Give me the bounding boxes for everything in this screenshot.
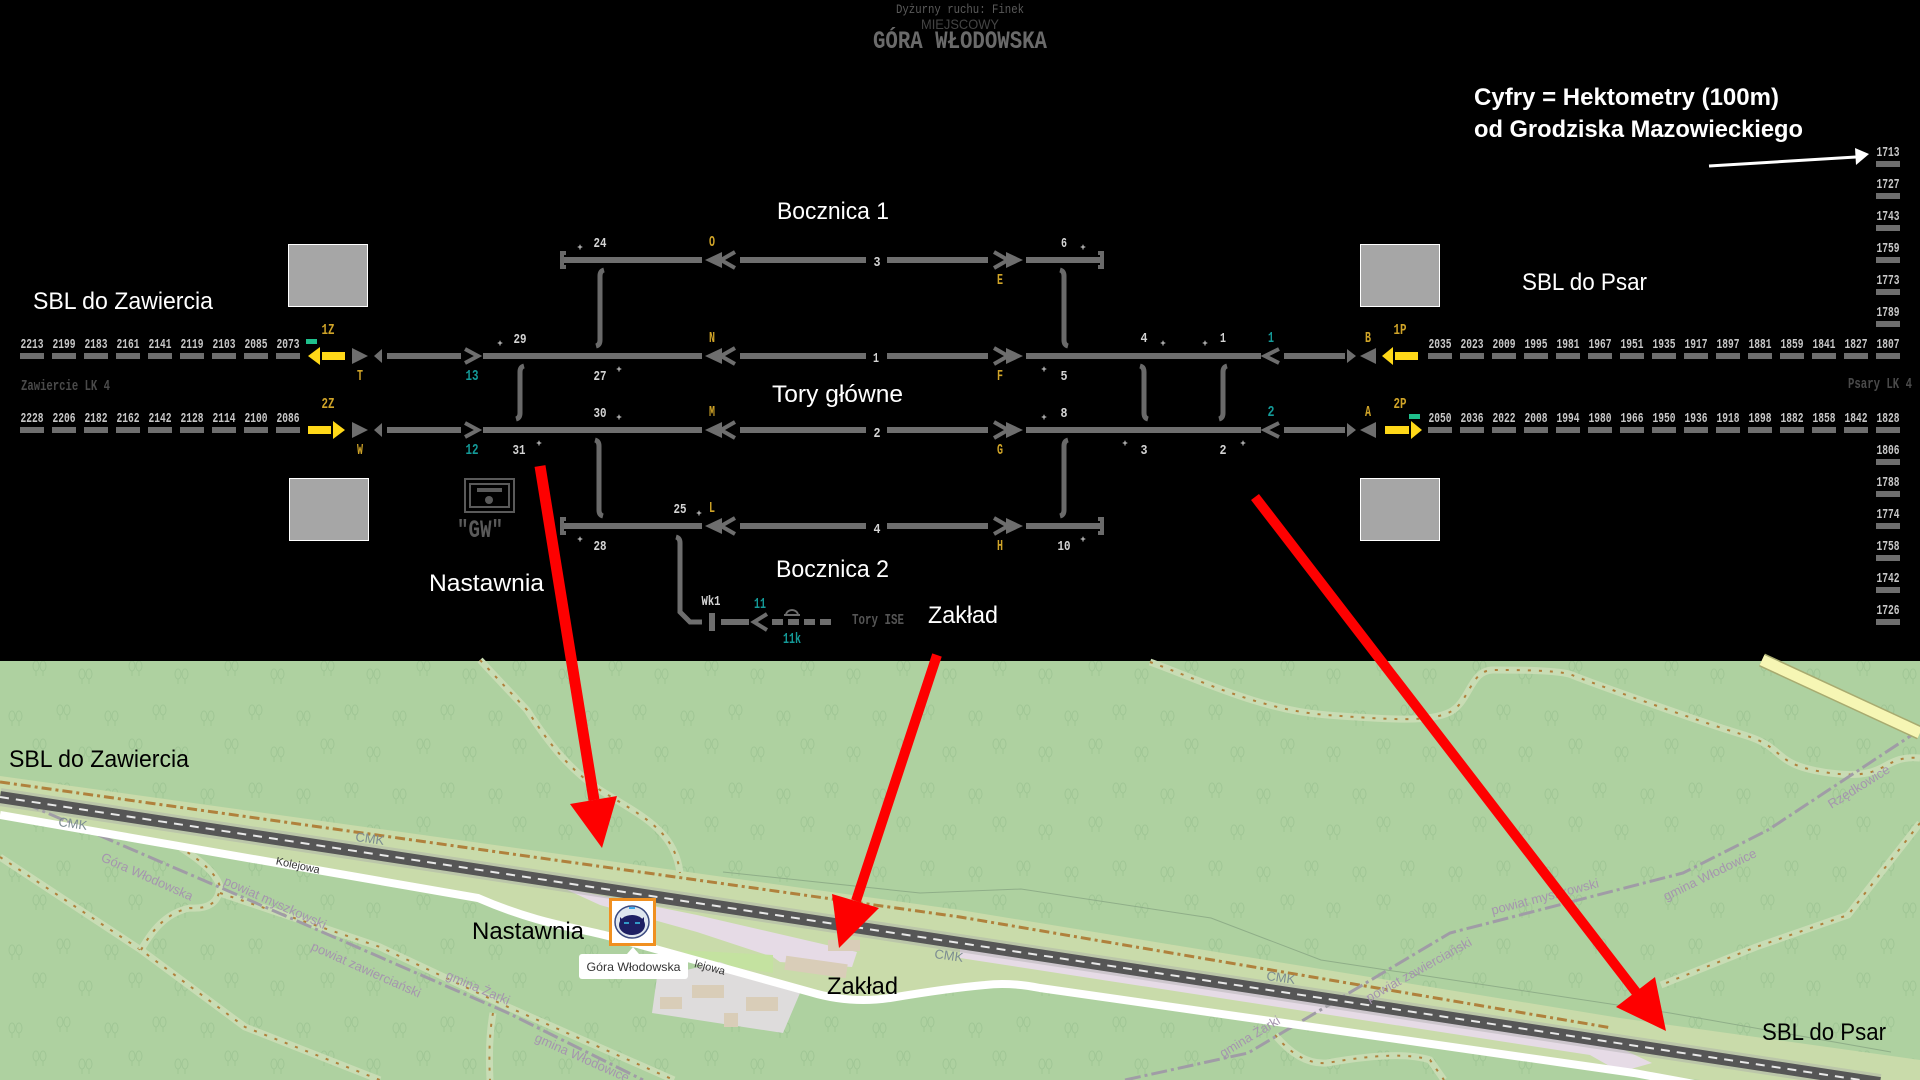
hectometre posts: left upper row: 2103 bbox=[212, 337, 236, 353]
arrow: white pointer to hectometre column bbox=[1709, 148, 1869, 166]
hectometre posts: left upper row: 2073 bbox=[276, 337, 300, 353]
map caption: Zakład: Zakład bbox=[827, 973, 898, 1000]
turnout and track numbers: + bbox=[616, 364, 622, 374]
signal letters: M bbox=[709, 404, 715, 421]
label: west signal names: 1Z bbox=[322, 322, 334, 339]
icon: yellow arrow 1P bbox=[1382, 347, 1418, 365]
map: administrative labels: powiat myszkowski bbox=[1489, 875, 1600, 918]
label: east signal names: 2P bbox=[1394, 396, 1406, 413]
indicator: green 2P bbox=[1409, 414, 1420, 419]
turnout and track numbers: + bbox=[1041, 364, 1047, 374]
signal letters: G bbox=[997, 442, 1003, 459]
hectometre posts: right lower row: 2036 bbox=[1460, 411, 1484, 427]
label: east signal names: A bbox=[1365, 404, 1371, 421]
hectometre posts: left lower row bbox=[20, 411, 300, 430]
hectometre posts: left lower row: 2114 bbox=[212, 411, 236, 427]
track 1: main bbox=[483, 348, 1261, 364]
map: railway and road labels: CMK bbox=[1266, 968, 1297, 987]
label: west signal names: T bbox=[357, 368, 363, 385]
title block: Dyżurny ruchu: Finek bbox=[896, 2, 1024, 17]
signal letters bbox=[709, 234, 1003, 555]
turnout and track numbers: 8 bbox=[1060, 406, 1068, 422]
hectometre posts: lower right column: 1806 bbox=[1876, 443, 1900, 459]
turnout and track numbers: + bbox=[1240, 438, 1246, 448]
map: administrative labels: Góra Włodowska bbox=[99, 850, 196, 904]
icon: signal box GW bbox=[457, 479, 514, 545]
caption: SBL do Zawiercia: SBL do Zawiercia bbox=[33, 288, 214, 315]
icon: map marker with cat robot bbox=[610, 900, 654, 944]
signal letters: F bbox=[997, 368, 1003, 385]
caption: Bocznica 2: Bocznica 2 bbox=[776, 556, 889, 583]
hectometre posts: left upper row bbox=[20, 337, 300, 356]
turnout and track numbers: 30 bbox=[594, 406, 606, 422]
turnout and track numbers: + bbox=[577, 534, 583, 544]
turnout and track numbers: + bbox=[1080, 534, 1086, 544]
hectometre posts: left lower row: 2100 bbox=[244, 411, 268, 427]
map: administrative labels: gmina Żarki bbox=[1217, 1013, 1283, 1060]
hectometre posts: right lower row: 2050 bbox=[1428, 411, 1452, 427]
hectometre posts: upper right column: 1759 bbox=[1876, 241, 1900, 257]
hectometre posts: right upper row: 1859 bbox=[1780, 337, 1804, 353]
map: administrative labels: powiat zawierciański bbox=[309, 939, 423, 1001]
hectometre posts: right upper row: 1917 bbox=[1684, 337, 1708, 353]
hectometre posts: right lower row: 1966 bbox=[1620, 411, 1644, 427]
signal letters: N bbox=[709, 330, 715, 347]
turnout and track numbers: 10 bbox=[1058, 539, 1070, 555]
hectometre posts: right upper row: 2009 bbox=[1492, 337, 1516, 353]
turnout and track numbers: + bbox=[616, 412, 622, 422]
label: east signal names: 1P bbox=[1394, 322, 1406, 339]
turnout and track numbers: 3 bbox=[874, 255, 880, 271]
turnout and track numbers: + bbox=[1122, 438, 1128, 448]
turnout and track numbers: 24 bbox=[594, 236, 606, 252]
industrial spur: Tory ISE: Wk1 bbox=[702, 594, 720, 610]
east approach and signals bbox=[1265, 322, 1422, 439]
turnout and track numbers: 6 bbox=[1061, 236, 1067, 252]
turnout and track numbers: 1 bbox=[873, 351, 879, 367]
turnout and track numbers: 25 bbox=[674, 502, 686, 518]
label: west signal names bbox=[322, 322, 478, 459]
signal letters: H bbox=[997, 538, 1003, 555]
turnout and track numbers: + bbox=[696, 508, 702, 518]
map: railway and road labels: CMK bbox=[934, 946, 965, 965]
hectometre posts: right upper row: 1995 bbox=[1524, 337, 1548, 353]
hectometre posts: right upper row: 1981 bbox=[1556, 337, 1580, 353]
label: east signal names: 1 bbox=[1268, 330, 1274, 347]
label: Zawiercie LK 4: Zawiercie LK 4 bbox=[21, 378, 110, 395]
map: railway and road labels: CMK bbox=[355, 829, 386, 848]
hectometre posts: right upper row: 1967 bbox=[1588, 337, 1612, 353]
hectometre posts: left upper row: 2119 bbox=[180, 337, 204, 353]
track 4: siding 2 bbox=[562, 518, 1102, 534]
turnout and track numbers: 5 bbox=[1060, 369, 1068, 385]
map caption: SBL do Zawiercia: SBL do Zawiercia bbox=[9, 746, 190, 773]
hectometre posts: right lower row: 1918 bbox=[1716, 411, 1740, 427]
hectometre posts: lower right column bbox=[1876, 443, 1900, 625]
map: white road bbox=[0, 815, 1700, 1080]
map: yellow road bbox=[1762, 660, 1920, 733]
map caption: SBL do Psar: SBL do Psar bbox=[1762, 1019, 1886, 1046]
map: forest background bbox=[0, 661, 1920, 1080]
hectometre posts: left lower row: 2162 bbox=[116, 411, 140, 427]
turnout and track numbers: + bbox=[497, 338, 503, 348]
grey box: bottom right bbox=[1360, 478, 1440, 540]
label: west signal names: 13 bbox=[466, 368, 478, 385]
turnout and track numbers: + bbox=[536, 438, 542, 448]
map: railway line bbox=[0, 797, 1880, 1080]
caption: hectometre explanation: od Grodziska Mazowieckiego bbox=[1474, 116, 1803, 143]
hectometre posts: right lower row: 1842 bbox=[1844, 411, 1868, 427]
hectometre posts: left upper row: 2213 bbox=[20, 337, 44, 353]
track 3: siding 1 bbox=[562, 252, 1102, 268]
arrow: red Zakład link bbox=[832, 655, 937, 948]
hectometre posts: upper right column: 1743 bbox=[1876, 209, 1900, 225]
hectometre posts: upper right column: 1713 bbox=[1876, 145, 1900, 161]
turnout and track numbers: + bbox=[1080, 242, 1086, 252]
caption: hectometre explanation: Cyfry = Hektometry (100m) bbox=[1474, 84, 1779, 111]
hectometre posts: lower right column: 1726 bbox=[1876, 603, 1900, 619]
hectometre posts: left upper row: 2161 bbox=[116, 337, 140, 353]
title block: GÓRA WŁODOWSKA bbox=[873, 26, 1047, 56]
caption: SBL do Psar: SBL do Psar bbox=[1522, 269, 1647, 296]
hectometre posts: left lower row: 2142 bbox=[148, 411, 172, 427]
caption: hectometre explanation bbox=[1474, 84, 1803, 143]
hectometre posts: right lower row: 2022 bbox=[1492, 411, 1516, 427]
label: east signal names: B bbox=[1365, 330, 1371, 347]
hectometre posts: left upper row: 2141 bbox=[148, 337, 172, 353]
map: administrative labels: Rzędkowice bbox=[1825, 762, 1892, 812]
label: east signal names: 2 bbox=[1268, 404, 1274, 421]
grey box: top right bbox=[1360, 244, 1440, 306]
indicator: green 1Z bbox=[306, 339, 317, 344]
hectometre posts: left lower row: 2128 bbox=[180, 411, 204, 427]
industrial spur: Tory ISE: Tory ISE bbox=[852, 612, 904, 629]
track 2: main bbox=[483, 422, 1261, 438]
hectometre posts: right lower row: 1994 bbox=[1556, 411, 1580, 427]
map: administrative labels: powiat myszkowski bbox=[222, 873, 329, 932]
hectometre posts: right upper row: 1897 bbox=[1716, 337, 1740, 353]
hectometre posts: right lower row: 1882 bbox=[1780, 411, 1804, 427]
map tooltip: Góra Włodowska bbox=[579, 947, 688, 979]
caption: Nastawnia: Nastawnia bbox=[429, 570, 545, 597]
map: railway and road labels: CMK bbox=[58, 814, 89, 833]
turnout and track numbers: 2 bbox=[874, 426, 880, 442]
hectometre posts: right upper row: 1881 bbox=[1748, 337, 1772, 353]
hectometre posts: lower right column: 1742 bbox=[1876, 571, 1900, 587]
turnout and track numbers: + bbox=[577, 242, 583, 252]
map: railway corridor bbox=[0, 776, 1920, 1080]
icon: yellow arrow 2Z bbox=[308, 421, 345, 439]
turnout and track numbers: + bbox=[1202, 338, 1208, 348]
icon: signal box GW: "GW" bbox=[457, 516, 503, 545]
map: station areas bbox=[563, 888, 1652, 1072]
hectometre posts: right lower row: 1980 bbox=[1588, 411, 1612, 427]
turnout and track numbers: + bbox=[1041, 412, 1047, 422]
crossovers bbox=[516, 270, 1227, 516]
map: administrative labels: gmina Żarki bbox=[444, 967, 512, 1008]
hectometre posts: right lower row: 1950 bbox=[1652, 411, 1676, 427]
arrow: red Nastawnia link bbox=[540, 466, 617, 848]
label: west signal names: W bbox=[357, 442, 363, 459]
map: railway and road labels: Kolejowa bbox=[275, 855, 322, 877]
hectometre posts: right upper row bbox=[1428, 337, 1900, 356]
turnout and track numbers: 28 bbox=[594, 539, 606, 555]
turnout and track numbers: 27 bbox=[594, 369, 606, 385]
hectometre posts: upper right column: 1727 bbox=[1876, 177, 1900, 193]
hectometre posts: right upper row: 2023 bbox=[1460, 337, 1484, 353]
turnout and track numbers: 29 bbox=[514, 332, 526, 348]
label: west signal names: 12 bbox=[466, 442, 478, 459]
map: administrative labels: powiat zawierciański bbox=[1363, 934, 1474, 1005]
grey box: top left bbox=[288, 244, 368, 306]
title block bbox=[873, 2, 1047, 56]
hectometre posts: upper right column: 1789 bbox=[1876, 305, 1900, 321]
signal letters: L bbox=[709, 500, 715, 517]
hectometre posts: left upper row: 2199 bbox=[52, 337, 76, 353]
map: railway and road labels bbox=[58, 814, 1297, 987]
turnout and track numbers: 4 bbox=[1140, 331, 1148, 347]
hectometre posts: lower right column: 1774 bbox=[1876, 507, 1900, 523]
map tooltip: Góra Włodowska: Góra Włodowska bbox=[586, 960, 681, 974]
hectometre posts: left lower row: 2206 bbox=[52, 411, 76, 427]
turnout and track numbers bbox=[497, 236, 1246, 555]
turnout and track numbers: + bbox=[1160, 338, 1166, 348]
industrial spur: Tory ISE: 11k bbox=[783, 631, 801, 648]
west approach tracks bbox=[352, 348, 478, 438]
signal letters: E bbox=[997, 272, 1003, 289]
map caption: Nastawnia: Nastawnia bbox=[472, 918, 585, 945]
title block: MIEJSCOWY bbox=[921, 16, 1000, 32]
hectometre posts: right upper row: 1827 bbox=[1844, 337, 1868, 353]
panel: black signalling diagram background bbox=[0, 0, 1920, 660]
hectometre posts: lower right column: 1758 bbox=[1876, 539, 1900, 555]
icon: yellow arrow 2P bbox=[1385, 421, 1422, 439]
map: administrative labels bbox=[99, 762, 1892, 1080]
turnout and track numbers: 2 bbox=[1220, 443, 1226, 459]
turnout and track numbers: 3 bbox=[1140, 443, 1148, 459]
hectometre posts: right lower row: 2008 bbox=[1524, 411, 1548, 427]
hectometre posts: lower right column: 1788 bbox=[1876, 475, 1900, 491]
hectometre posts: left lower row: 2228 bbox=[20, 411, 44, 427]
hectometre posts: left upper row: 2085 bbox=[244, 337, 268, 353]
map: paths and boundaries bbox=[0, 660, 1920, 1080]
hectometre posts: right lower row: 1936 bbox=[1684, 411, 1708, 427]
hectometre posts: right lower row: 1898 bbox=[1748, 411, 1772, 427]
caption: Zakład: Zakład bbox=[928, 602, 998, 629]
west signal group: 1Z and 2Z bbox=[306, 322, 478, 459]
hectometre posts: upper right column: 1773 bbox=[1876, 273, 1900, 289]
industrial spur: Tory ISE: 11 bbox=[754, 596, 766, 613]
label: east signal names bbox=[1268, 322, 1406, 421]
track diagram: station tracks bbox=[483, 234, 1261, 555]
industrial spur: Tory ISE bbox=[676, 537, 904, 648]
hectometre posts: left lower row: 2182 bbox=[84, 411, 108, 427]
caption: Tory główne: Tory główne bbox=[772, 381, 903, 408]
label: west signal names: 2Z bbox=[322, 396, 334, 413]
hectometre posts: right lower row: 1858 bbox=[1812, 411, 1836, 427]
signal letters: O bbox=[709, 234, 715, 251]
grey box: bottom left bbox=[290, 478, 368, 540]
hectometre posts: right lower row: 1828 bbox=[1876, 411, 1900, 427]
hectometre posts: left upper row: 2183 bbox=[84, 337, 108, 353]
hectometre posts: upper right column bbox=[1876, 145, 1900, 327]
icon: yellow arrow 1Z bbox=[308, 347, 345, 365]
hectometre posts: right upper row: 1841 bbox=[1812, 337, 1836, 353]
turnout and track numbers: 1 bbox=[1220, 331, 1226, 347]
caption: Bocznica 1: Bocznica 1 bbox=[777, 198, 889, 225]
panel: map bbox=[0, 660, 1920, 1080]
hectometre posts: right upper row: 1951 bbox=[1620, 337, 1644, 353]
map: railway and road labels: lejowa bbox=[693, 958, 727, 978]
turnout and track numbers: 4 bbox=[874, 522, 880, 538]
hectometre posts: right upper row: 1935 bbox=[1652, 337, 1676, 353]
arrow: red SBL do Psar link bbox=[1255, 497, 1666, 1031]
turnout and track numbers: 31 bbox=[512, 443, 526, 459]
hectometre posts: right upper row: 2035 bbox=[1428, 337, 1452, 353]
hectometre posts: right lower row bbox=[1428, 411, 1900, 430]
hectometre posts: right upper row: 1807 bbox=[1876, 337, 1900, 353]
map: administrative labels: gmina Włodowice bbox=[1661, 845, 1759, 904]
hectometre posts: left lower row: 2086 bbox=[276, 411, 300, 427]
